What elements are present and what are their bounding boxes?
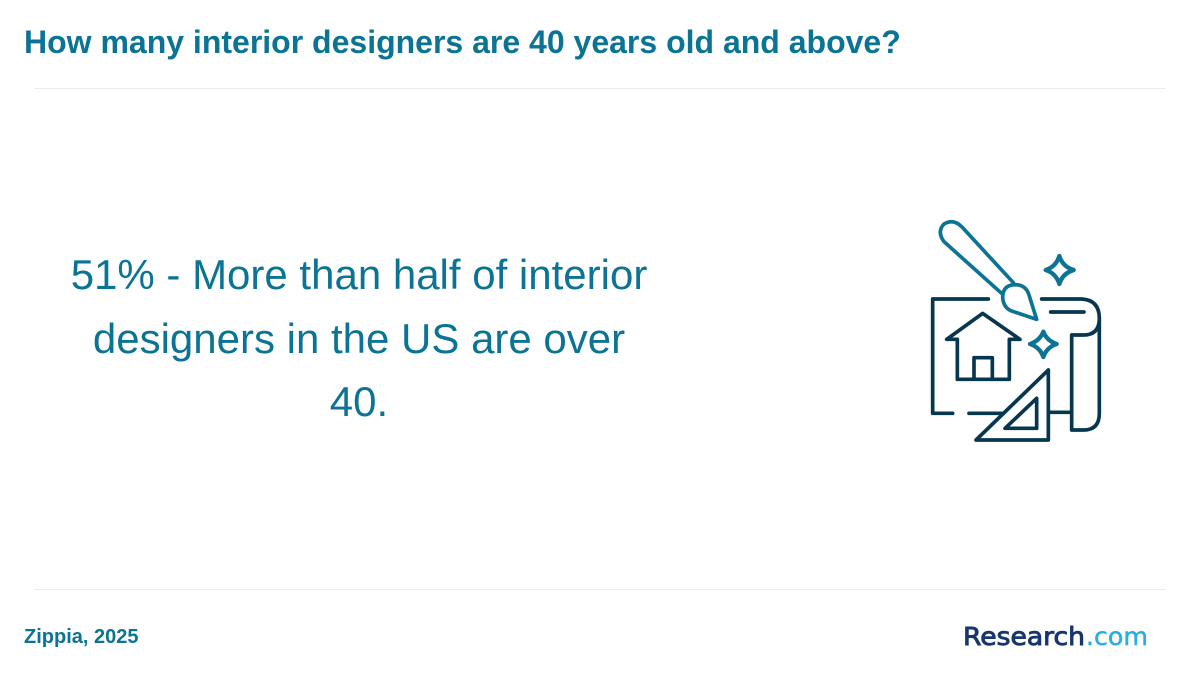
main statistic text: designers in the US are over (93, 314, 625, 362)
icon part: house (947, 313, 1020, 379)
logo: Research.com (963, 622, 1148, 651)
logo: Research.com: .com (1086, 622, 1148, 651)
icon part: sparkles (1030, 256, 1074, 357)
main statistic text: 51% - More than half of interior (71, 251, 647, 298)
main statistic text (71, 251, 647, 425)
icon part: blueprint scroll (933, 299, 1099, 430)
title: How many interior designers are 40 years old and above? (24, 24, 901, 60)
logo: Research.com: Research (963, 622, 1085, 651)
icon: blueprint with house, paintbrush and set square (930, 220, 1102, 442)
icon part: set square (976, 370, 1048, 440)
main statistic text: 40. (330, 378, 388, 425)
source: Zippia, 2025 (24, 626, 138, 648)
icon part: paintbrush (940, 222, 1037, 319)
